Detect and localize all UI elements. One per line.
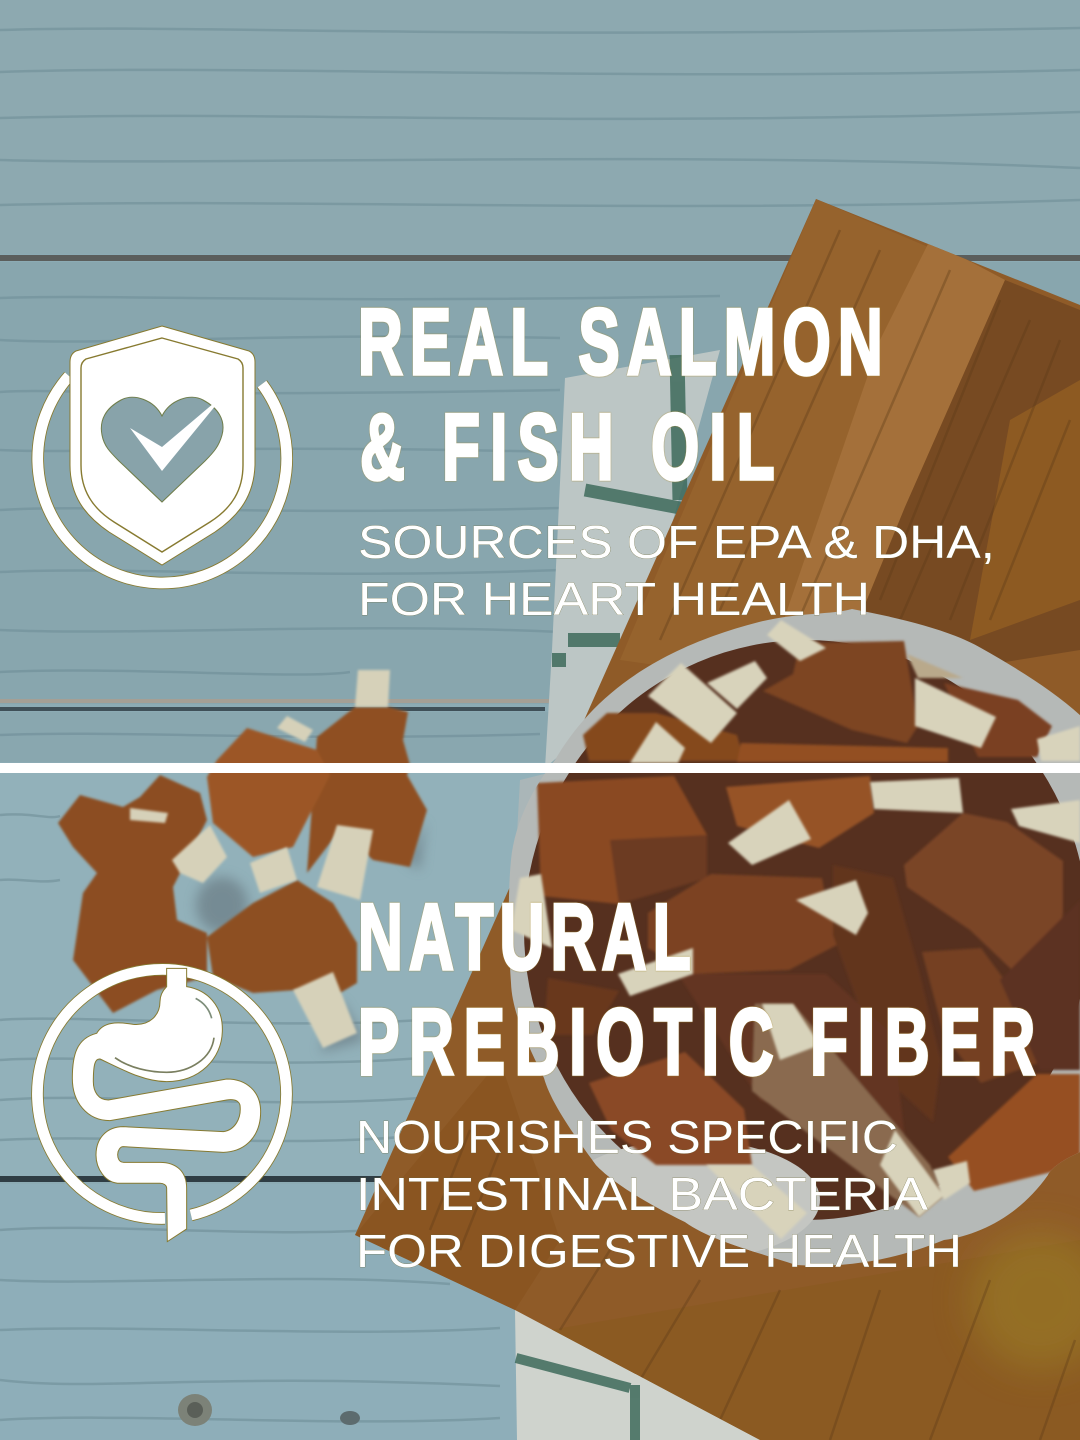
description text: NOURISHES SPECIFIC — [356, 1111, 898, 1163]
treats in bowl: sticks — [511, 620, 1080, 1239]
heading: & FISH OIL — [360, 394, 774, 499]
cutting board — [355, 199, 1080, 1440]
description text: SOURCES OF EPA & DHA, — [358, 516, 995, 568]
treat meat — [58, 707, 427, 1013]
description text: INTESTINAL BACTERIA — [356, 1168, 928, 1220]
icon: stomach and intestines — [37, 968, 286, 1242]
divider bar — [0, 763, 1080, 773]
description text: FOR HEART HEALTH — [358, 573, 870, 625]
loose treats on table — [58, 670, 427, 1052]
description text: FOR DIGESTIVE HEALTH — [356, 1225, 962, 1277]
description text — [358, 516, 995, 625]
icon: shield with heart and checkmark — [38, 326, 287, 583]
treat shadows — [196, 820, 425, 1052]
bowl — [509, 609, 1080, 1266]
towel — [510, 350, 780, 1440]
heading: NATURAL — [358, 884, 691, 989]
description text — [356, 1111, 962, 1277]
heading: PREBIOTIC FIBER — [358, 989, 1035, 1094]
panel: natural prebiotic fiber — [37, 884, 1035, 1277]
heading — [358, 289, 883, 499]
treats in bowl: meat — [537, 641, 1080, 1217]
heading — [358, 884, 1035, 1094]
treat sticks — [130, 670, 390, 1048]
heading: REAL SALMON — [358, 289, 883, 394]
panel: real salmon and fish oil — [38, 289, 995, 625]
